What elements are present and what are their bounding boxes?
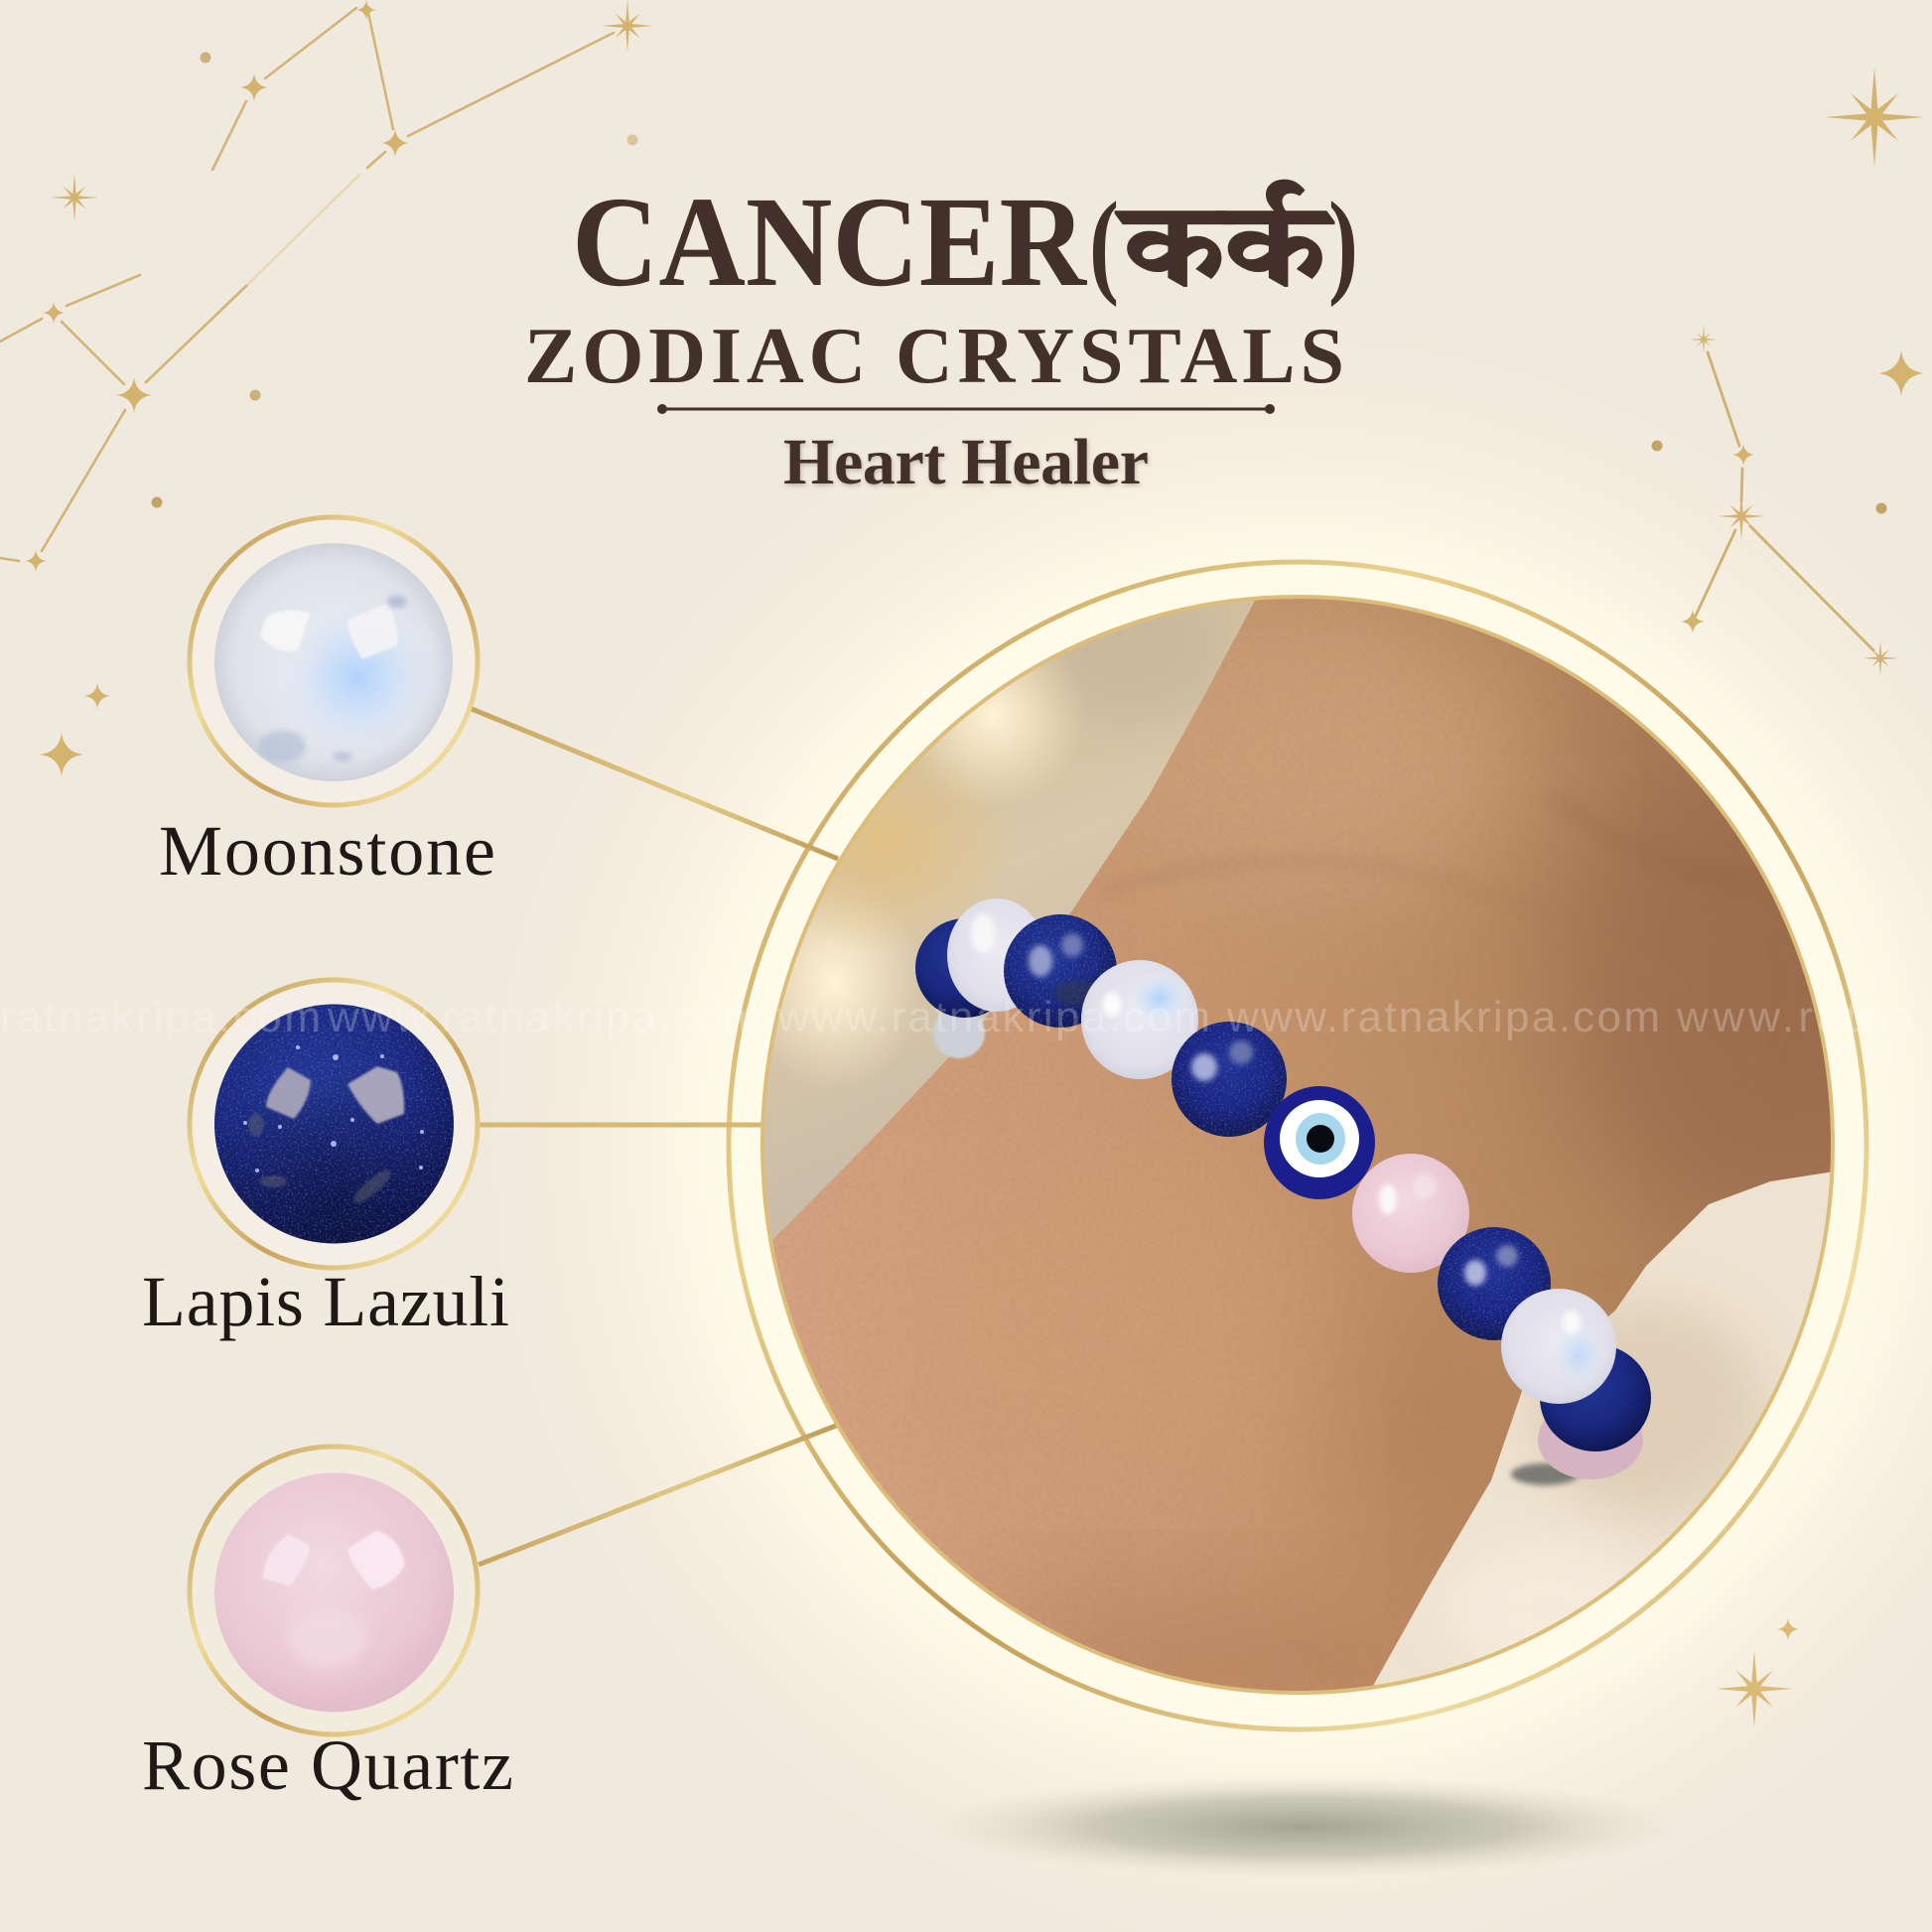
label: Lapis Lazuli: Lapis Lazuli — [142, 1262, 509, 1341]
moonstone bead with blue flash — [1081, 960, 1198, 1079]
bracelet photo — [764, 599, 1831, 1691]
connector: lapis lazuli to bracelet — [479, 1122, 764, 1128]
inner gold ring — [762, 597, 1833, 1693]
rose quartz sphere — [214, 1473, 454, 1712]
tagline: Heart Healer — [783, 426, 1149, 498]
back lapis — [915, 918, 990, 1018]
floating shadow under photo — [927, 1775, 1682, 1878]
watermark: www.ratnakripa.com — [1226, 993, 1660, 1041]
sparkles: bottom right — [1716, 1618, 1799, 1727]
constellation: top left — [0, 0, 653, 776]
lapis sphere — [214, 1005, 454, 1243]
gem: lapis lazuli — [190, 980, 478, 1268]
lapis ring — [190, 980, 478, 1268]
title: CANCER: CANCER — [572, 171, 1088, 314]
backdrop lower right — [1365, 1170, 1847, 1708]
evil eye bead — [1264, 1086, 1375, 1199]
watermark: www.ratnakripa.com — [327, 993, 760, 1041]
moonstone bead — [947, 898, 1036, 1012]
rose quartz bead — [1352, 1154, 1469, 1273]
moonstone ring — [190, 517, 478, 805]
title: close parenthesis: ) — [1328, 178, 1358, 308]
watermark: www.ratnakripa.com — [776, 993, 1210, 1041]
connector: rose quartz to bracelet — [479, 1426, 836, 1565]
backdrop blur patches — [745, 586, 1767, 1678]
back moonstone — [933, 1007, 985, 1058]
moonstone sphere — [214, 543, 453, 781]
rose quartz ring — [190, 1447, 478, 1734]
lapis bead — [1004, 914, 1117, 1028]
watermark — [0, 993, 1916, 1041]
watermark: www.ratna — [1676, 993, 1916, 1041]
back lapis bead — [1540, 1344, 1651, 1451]
label: Moonstone: Moonstone — [159, 811, 495, 891]
subtitle: ZODIAC CRYSTALS — [524, 313, 1344, 400]
constellation: top right — [1652, 68, 1924, 676]
moonstone bead — [1501, 1289, 1616, 1404]
outer gold ring — [729, 562, 1866, 1729]
label: Rose Quartz: Rose Quartz — [142, 1725, 513, 1805]
lapis bead — [1438, 1227, 1551, 1340]
watermark: ratnakripa.com — [0, 993, 321, 1041]
photo backdrop — [755, 586, 1847, 1708]
title — [572, 171, 1358, 314]
back rose quartz bead — [1538, 1420, 1643, 1479]
divider — [657, 404, 1275, 414]
connector: moonstone to bracelet — [472, 709, 838, 859]
grey clasp bead — [1511, 1463, 1579, 1485]
title: Hindi name: कर्क — [1115, 180, 1334, 311]
arm — [772, 599, 1831, 1691]
lapis bead — [1172, 1022, 1287, 1137]
gem: moonstone — [190, 517, 478, 805]
title: open parenthesis: ( — [1089, 178, 1119, 308]
bracelet beads — [915, 898, 1651, 1485]
gem: rose quartz — [190, 1447, 478, 1734]
